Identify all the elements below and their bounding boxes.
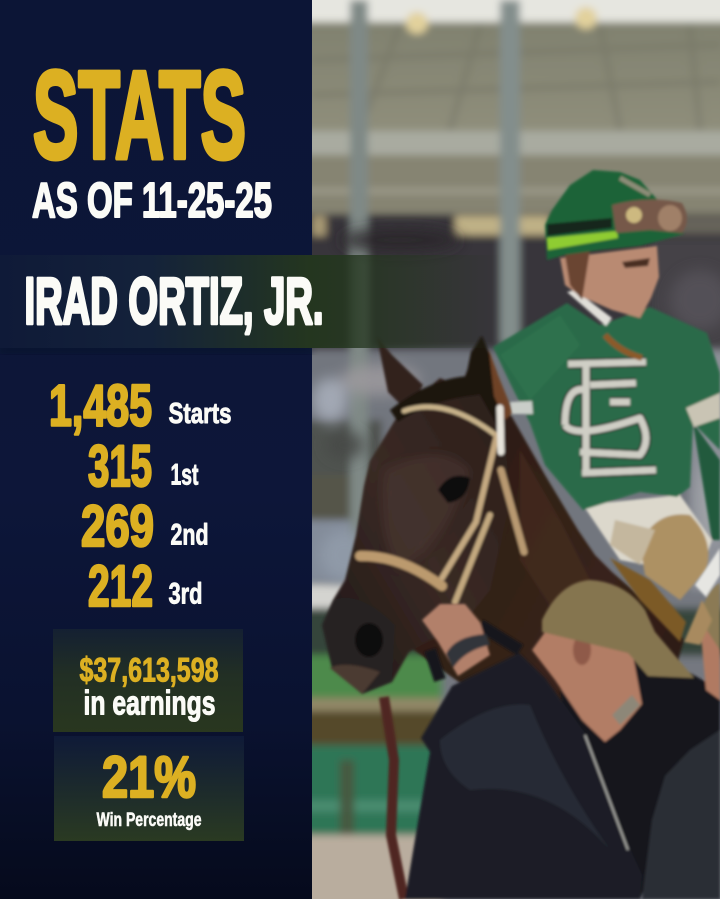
collar bbox=[567, 290, 612, 326]
handlers bbox=[384, 548, 720, 899]
panel: win percentage bbox=[54, 736, 244, 841]
stat: second-place finishes: 2nd bbox=[170, 518, 208, 552]
earnings label: in earnings bbox=[84, 684, 216, 722]
man's face bbox=[532, 632, 642, 742]
stat: third-place finishes: 3rd bbox=[168, 578, 202, 610]
goggles bbox=[612, 199, 687, 233]
cap bbox=[542, 580, 694, 678]
horse neck and body bbox=[413, 338, 684, 702]
crowd blobs bbox=[312, 226, 720, 580]
stat: starts: 1,485 bbox=[49, 374, 152, 438]
sleeve stripes bbox=[510, 401, 533, 414]
stat: second-place finishes: 269 bbox=[81, 494, 154, 559]
panel: earnings bbox=[53, 629, 243, 732]
stat: third-place finishes: 212 bbox=[88, 554, 153, 619]
jockey bbox=[493, 170, 720, 642]
stat: first-place finishes: 315 bbox=[88, 434, 152, 499]
muzzle bbox=[322, 600, 385, 692]
name banner bbox=[0, 255, 500, 354]
horse bbox=[320, 336, 684, 702]
win percentage label: Win Percentage bbox=[96, 810, 202, 831]
bridle bbox=[360, 407, 524, 602]
win percentage value: 21% bbox=[102, 745, 196, 810]
jersey bbox=[493, 303, 720, 510]
man's jacket bbox=[405, 653, 642, 899]
helmet bbox=[545, 170, 684, 260]
lead shank bbox=[430, 625, 520, 680]
stat: first-place finishes: 1st bbox=[170, 458, 199, 492]
photo: jockey and horse after the race bbox=[300, 0, 720, 899]
title: STATS: STATS bbox=[33, 47, 246, 185]
jersey logo: STL monogram bbox=[565, 362, 656, 473]
dark jacket behind bbox=[560, 650, 720, 899]
horse head bbox=[332, 376, 498, 682]
muddy boot bbox=[640, 514, 708, 600]
saddle bbox=[610, 558, 686, 642]
subtitle: as-of date: AS OF 11-25-25 bbox=[32, 174, 272, 228]
stat: starts: Starts bbox=[168, 398, 232, 430]
chinstrap bbox=[605, 335, 642, 358]
arm and hand bbox=[422, 604, 490, 676]
nostril and eye bbox=[355, 623, 383, 657]
face bbox=[560, 246, 659, 318]
right handler bbox=[642, 730, 720, 899]
watch bbox=[446, 634, 490, 668]
photo background: blurred grandstand bbox=[300, 0, 720, 899]
horse ears bbox=[378, 342, 424, 404]
earnings amount: $37,613,598 bbox=[80, 652, 218, 690]
white pants bbox=[583, 495, 712, 575]
jockey name: IRAD ORTIZ, JR. bbox=[24, 264, 324, 338]
lead rein bbox=[384, 697, 404, 899]
panel: dark navy stats column bbox=[0, 0, 312, 899]
